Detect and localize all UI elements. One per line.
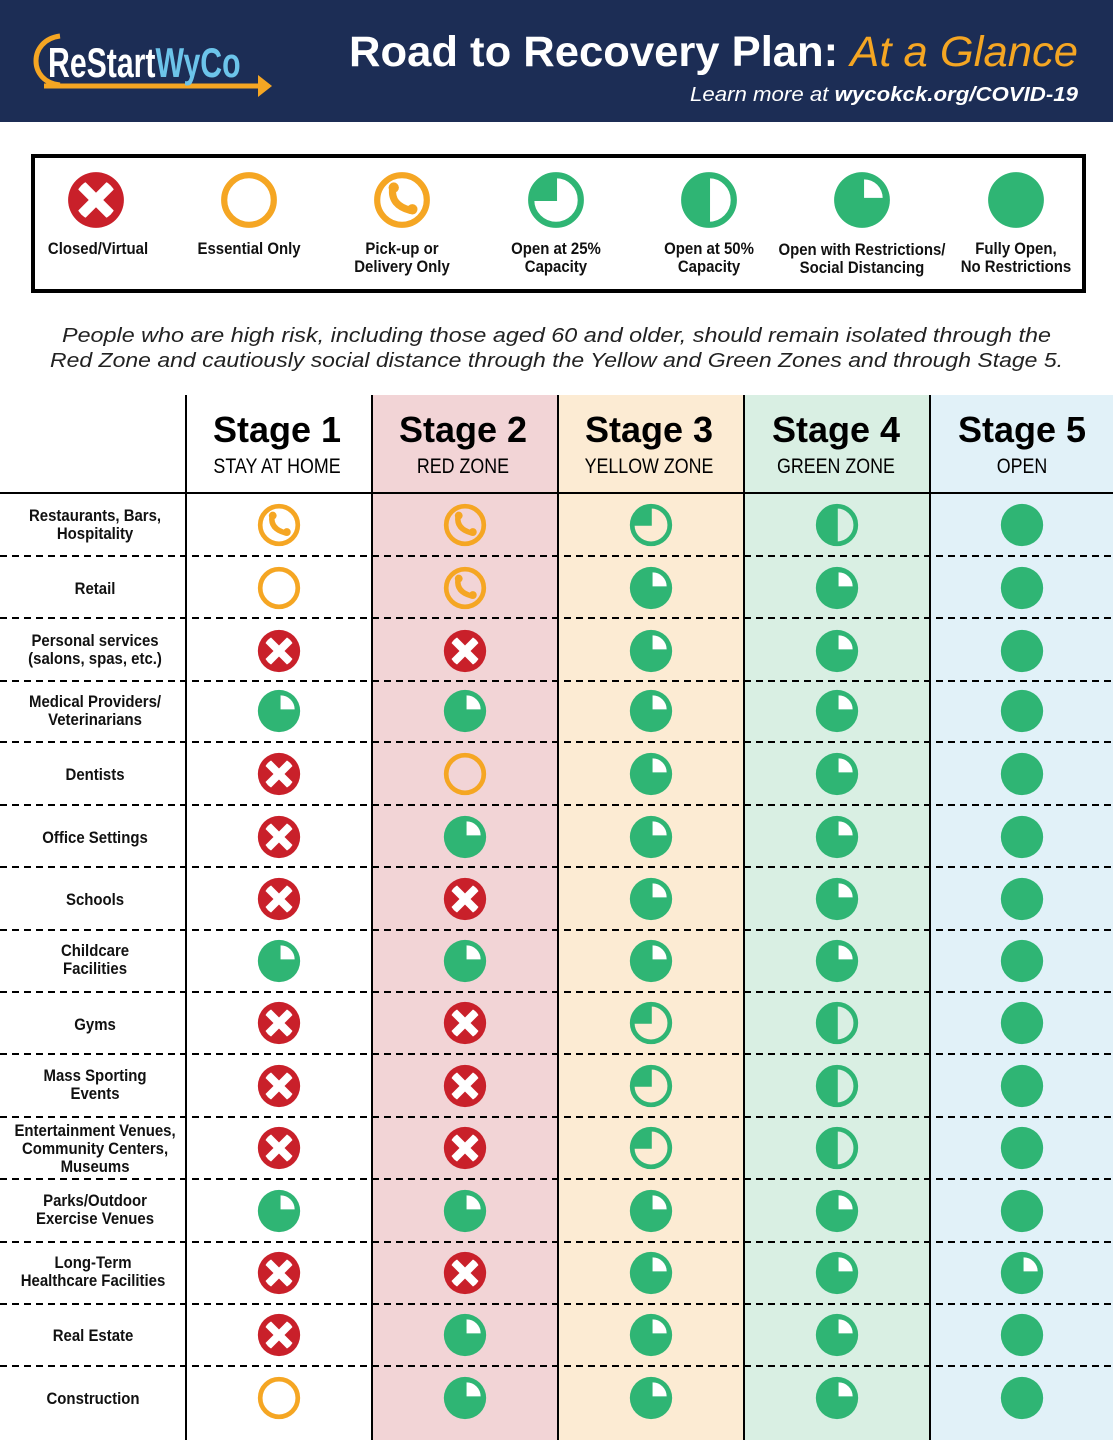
stage headers: GREEN ZONE <box>777 455 895 478</box>
stage headers: OPEN <box>997 455 1047 478</box>
row labels: Childcare <box>61 942 129 960</box>
row labels: Medical Providers/ <box>29 693 162 711</box>
row labels: (salons, spas, etc.) <box>28 650 162 668</box>
stage headers: Stage 2 <box>399 409 527 450</box>
subtitle link: Learn more at wycokck.org/COVID-19 <box>690 84 1079 106</box>
legend panel: Capacity <box>678 258 740 276</box>
row labels: Long-Term <box>55 1254 131 1272</box>
legend panel: Pick-up or <box>365 240 439 258</box>
note text: People who are high risk, including those aged 60 and older, should remain isolated through the <box>62 325 1051 347</box>
status icons grid <box>258 504 1043 1419</box>
note text <box>50 325 1063 372</box>
note text: Red Zone and cautiously social distance through the Yellow and Green Zones and through Stage 5. <box>50 350 1063 372</box>
header banner <box>0 0 1113 122</box>
row labels: Real Estate <box>53 1327 133 1345</box>
legend panel <box>33 156 1084 291</box>
legend panel: Social Distancing <box>800 259 924 277</box>
row labels: Veterinarians <box>48 711 142 729</box>
legend panel: Capacity <box>525 258 587 276</box>
legend panel: Closed/Virtual <box>48 240 148 258</box>
logo <box>36 36 272 97</box>
stage column backgrounds <box>372 395 1113 1440</box>
row labels: Exercise Venues <box>36 1210 154 1228</box>
stage headers: Stage 3 <box>585 409 713 450</box>
row labels: Healthcare Facilities <box>21 1272 165 1290</box>
legend panel: Essential Only <box>198 240 301 258</box>
row labels: Schools <box>66 891 124 909</box>
legend panel: Open at 25% <box>511 240 601 258</box>
row labels: Dentists <box>66 766 125 784</box>
stage headers: YELLOW ZONE <box>585 455 713 478</box>
title: Road to Recovery Plan: At a Glance <box>349 28 1078 76</box>
stage headers: RED ZONE <box>417 455 509 478</box>
stage headers: Stage 4 <box>772 409 900 450</box>
stage headers: STAY AT HOME <box>213 455 341 478</box>
row labels: Entertainment Venues, <box>14 1122 176 1140</box>
stage headers: Stage 5 <box>958 409 1086 450</box>
legend panel: No Restrictions <box>961 258 1071 276</box>
stage headers <box>213 409 1086 478</box>
legend panel: Delivery Only <box>354 258 450 276</box>
grid lines <box>0 395 1113 1440</box>
logo: ReStartWyCo <box>48 39 241 86</box>
row labels: Office Settings <box>42 829 148 847</box>
row labels <box>14 507 176 1408</box>
row labels: Community Centers, <box>22 1140 168 1158</box>
legend panel: Fully Open, <box>975 240 1057 258</box>
row labels: Retail <box>75 580 115 598</box>
row labels: Facilities <box>63 960 127 978</box>
row labels: Museums <box>61 1158 130 1176</box>
row labels: Gyms <box>74 1016 116 1034</box>
row labels: Parks/Outdoor <box>43 1192 147 1210</box>
row labels: Hospitality <box>57 525 133 543</box>
stage headers: Stage 1 <box>213 409 341 450</box>
legend panel: Open at 50% <box>664 240 754 258</box>
row labels: Events <box>71 1085 120 1103</box>
row labels: Construction <box>47 1390 140 1408</box>
row labels: Restaurants, Bars, <box>29 507 161 525</box>
legend panel: Open with Restrictions/ <box>778 241 946 259</box>
row labels: Mass Sporting <box>44 1067 147 1085</box>
row labels: Personal services <box>31 632 159 650</box>
